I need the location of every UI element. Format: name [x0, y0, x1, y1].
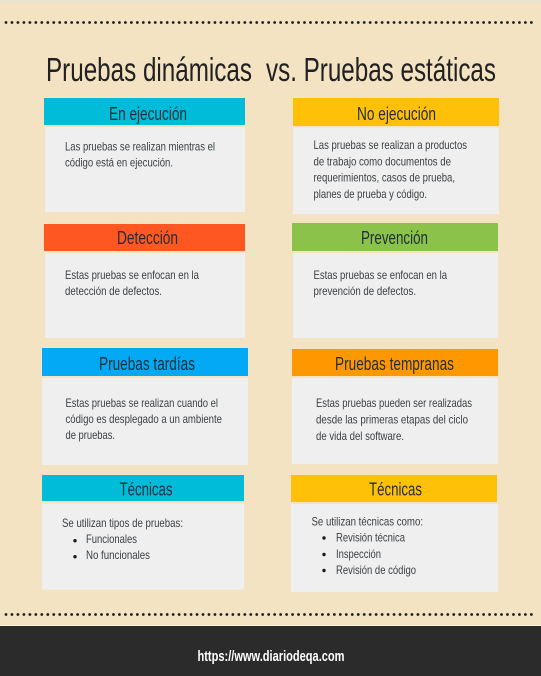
panel: prevención: Prevención — [361, 227, 428, 248]
panel: no ejecución: de trabajo como documentos de — [314, 154, 451, 168]
panel: pruebas tardías: código es desplegado a un ambiente — [66, 412, 222, 426]
panel: detección: detección de defectos. — [65, 284, 162, 298]
panel: pruebas tempranas: desde las primeras etapas del ciclo — [316, 412, 468, 426]
panel: pruebas tempranas — [292, 349, 498, 464]
panel: prevención: prevención de defectos. — [314, 284, 416, 298]
panel: en ejecución: Las pruebas se realizan mientras el — [65, 140, 215, 154]
panel: técnicas dinámicas: Técnicas — [120, 478, 172, 500]
footer — [0, 625, 541, 676]
panel: técnicas estáticas: Se utilizan técnicas como: — [312, 514, 423, 528]
panel: no ejecución — [293, 98, 499, 214]
panel: en ejecución — [44, 98, 245, 212]
panel: detección: Estas pruebas se enfocan en la — [65, 268, 199, 282]
panel: pruebas tardías — [42, 348, 248, 465]
panel: no ejecución: planes de prueba y código. — [314, 187, 427, 201]
panel: no ejecución: requerimientos, casos de prueba, — [314, 170, 455, 184]
panel: prevención: Estas pruebas se enfocan en la — [314, 268, 447, 282]
panel: técnicas estáticas: Técnicas — [369, 478, 422, 500]
panel: no ejecución: No ejecución — [357, 103, 436, 124]
panel: pruebas tempranas: de vida del software. — [316, 429, 404, 443]
panel: técnicas dinámicas: Funcionales — [86, 532, 137, 546]
title: Pruebas dinámicas — [46, 51, 252, 88]
panel: pruebas tempranas: Estas pruebas pueden ser realizadas — [316, 396, 472, 410]
panel: no ejecución: Las pruebas se realizan a productos — [314, 138, 467, 152]
panel: técnicas estáticas: Revisión técnica — [336, 530, 405, 544]
panel: en ejecución: En ejecución — [109, 103, 187, 124]
panel: detección — [44, 224, 245, 338]
panel: técnicas dinámicas — [42, 475, 244, 590]
panel: técnicas estáticas: Inspección — [336, 547, 381, 561]
title — [46, 51, 496, 88]
panel: prevención — [292, 223, 498, 338]
panel: en ejecución: código está en ejecución. — [65, 156, 173, 170]
panel: técnicas estáticas: Revisión de código — [336, 563, 416, 577]
panel: técnicas dinámicas: Se utilizan tipos de pruebas: — [62, 516, 183, 530]
panel: pruebas tempranas: Pruebas tempranas — [335, 353, 454, 374]
panel: pruebas tardías: de pruebas. — [66, 428, 115, 442]
panel: pruebas tardías: Estas pruebas se realizan cuando el — [66, 396, 218, 410]
panel: técnicas estáticas — [291, 475, 498, 592]
panel: pruebas tardías: Pruebas tardías — [99, 353, 195, 374]
panel: detección: Detección — [117, 227, 178, 248]
panel: técnicas dinámicas: No funcionales — [86, 548, 150, 562]
footer: https://www.diariodeqa.com — [198, 648, 344, 665]
